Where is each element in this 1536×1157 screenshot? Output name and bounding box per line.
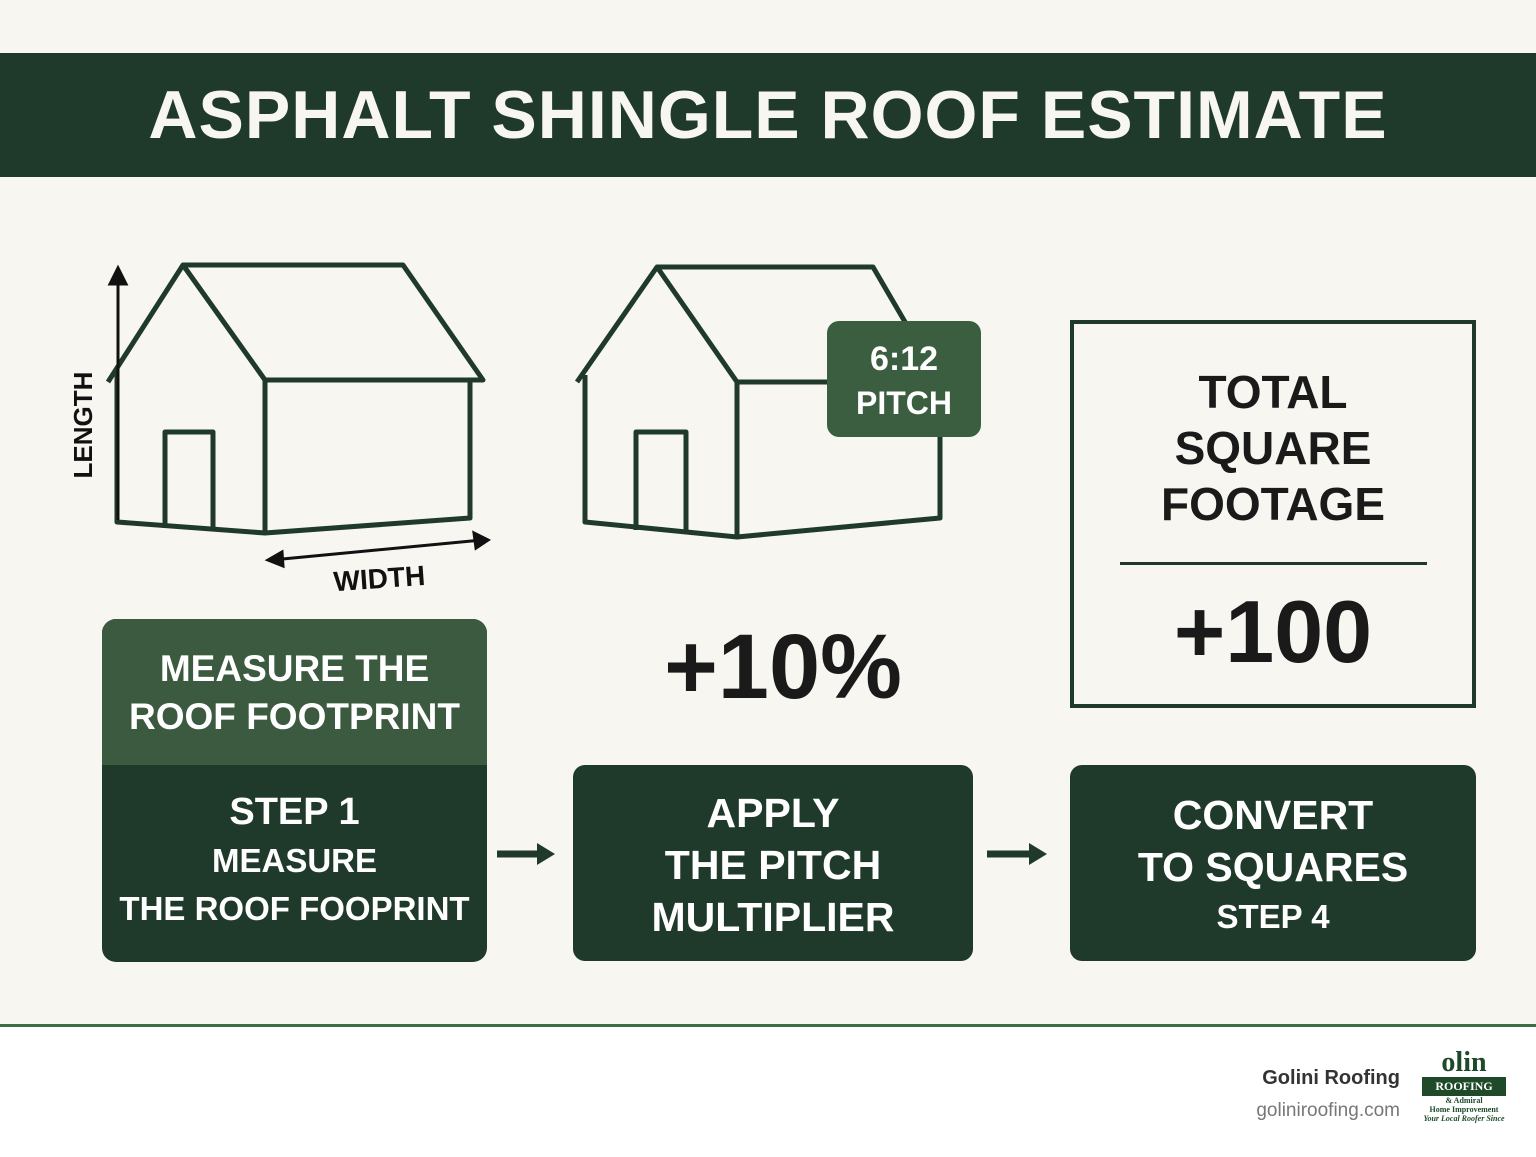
step 1 header: MEASURE THE — [160, 648, 429, 689]
panel: step 2: APPLY — [707, 790, 839, 836]
panel: step 4: TO SQUARES — [1138, 844, 1408, 890]
arrow — [987, 843, 1047, 865]
illustration: house with dimensions — [68, 262, 491, 597]
step 1 body — [119, 791, 470, 927]
step 1 header: ROOF FOOTPRINT — [129, 696, 460, 737]
footer brand text: goliniroofing.com — [1256, 1100, 1400, 1121]
footer brand text — [1256, 1067, 1400, 1121]
step 1 body: THE ROOF FOOPRINT — [119, 890, 470, 927]
panel: step 4: CONVERT — [1173, 792, 1373, 838]
illustration: house with pitch — [575, 264, 942, 540]
logo: Home Improvement — [1430, 1105, 1498, 1114]
logo: Your Local Roofer Since — [1423, 1114, 1505, 1123]
illustration: house with dimensions: WIDTH — [332, 560, 426, 597]
logo — [1422, 1047, 1506, 1123]
step 1 header — [102, 619, 487, 765]
badge: pitch: PITCH — [856, 385, 952, 421]
logo: olin — [1441, 1047, 1487, 1078]
panel: step 2 — [573, 765, 973, 961]
panel: total square footage: +100 — [1174, 582, 1372, 681]
badge: pitch — [827, 321, 981, 437]
step 1 body: STEP 1 — [229, 791, 360, 833]
panel: step 4 — [1070, 765, 1476, 961]
panel: step 1 — [102, 619, 487, 962]
panel: total square footage: TOTAL — [1198, 366, 1348, 418]
logo: & Admiral — [1445, 1096, 1483, 1105]
panel: step 4: STEP 4 — [1216, 898, 1330, 935]
panel: total square footage: FOOTAGE — [1161, 478, 1385, 530]
logo: ROOFING — [1435, 1079, 1493, 1093]
footer — [0, 1024, 1536, 1157]
panel: step 2: THE PITCH — [665, 842, 881, 888]
panel: total square footage: SQUARE — [1175, 422, 1371, 474]
arrow — [497, 843, 555, 865]
illustration: house with dimensions: LENGTH — [68, 372, 98, 478]
badge: pitch: 6:12 — [870, 340, 938, 378]
text: +10%: +10% — [664, 616, 902, 718]
title banner: ASPHALT SHINGLE ROOF ESTIMATE — [148, 77, 1388, 153]
step 1 body: MEASURE — [212, 842, 377, 879]
footer brand text: Golini Roofing — [1262, 1067, 1400, 1089]
panel: total square footage — [1070, 320, 1476, 708]
panel: step 2: MULTIPLIER — [652, 894, 894, 940]
title banner — [0, 53, 1536, 177]
